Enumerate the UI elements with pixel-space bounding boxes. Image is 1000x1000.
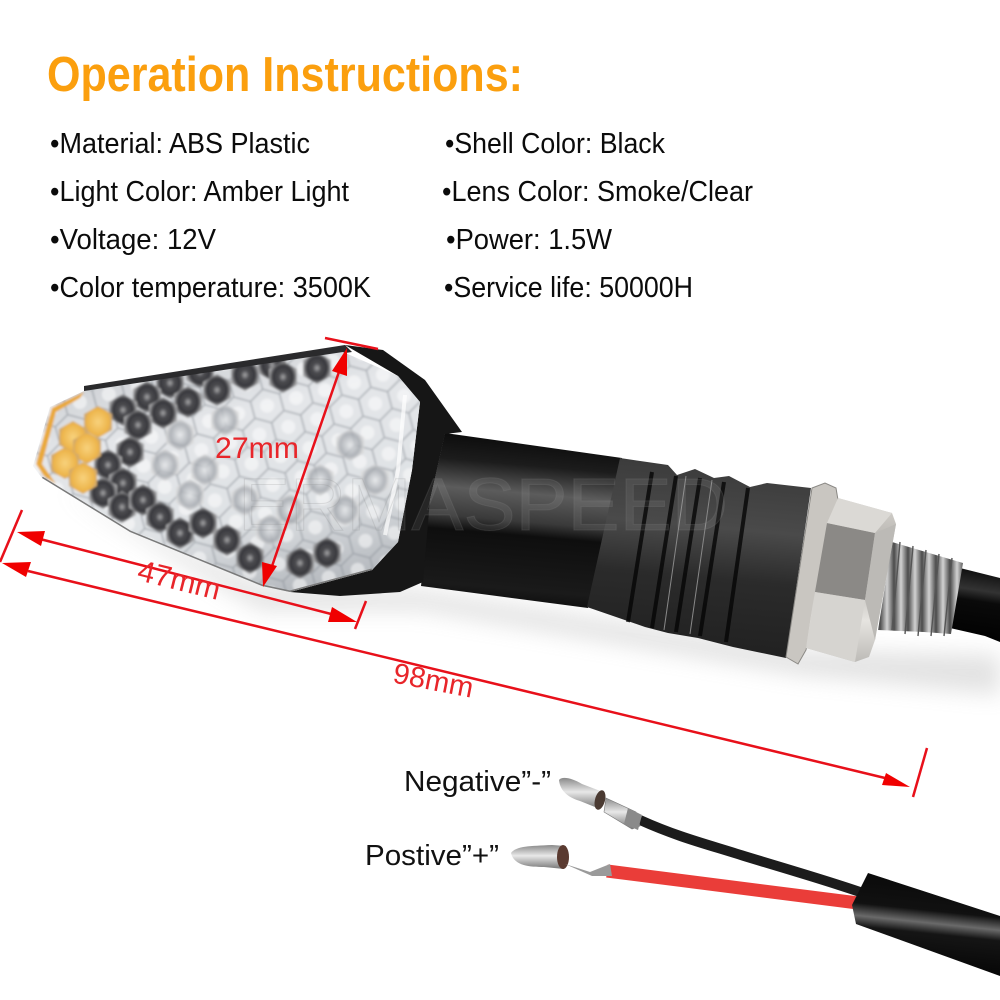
arrowhead left (2, 562, 31, 577)
red positive wire (607, 871, 858, 903)
smoked lens cells (89, 349, 341, 579)
threaded bolt (878, 542, 963, 636)
black housing (290, 345, 462, 596)
black tube body (421, 433, 622, 608)
lens rim highlight (42, 478, 372, 592)
arrowhead right (882, 773, 910, 787)
positive bullet connector (511, 845, 612, 876)
faint watermark: ERMASPEED (238, 463, 728, 546)
arrowhead bottom (262, 562, 277, 587)
arrowhead right (328, 607, 357, 622)
specification list: left column: •Voltage: 12V (50, 224, 217, 256)
mid grey lens cells (151, 404, 389, 546)
specification list: right column: •Power: 1.5W (446, 224, 613, 256)
black negative wire (640, 820, 860, 892)
rear cable (950, 568, 1000, 642)
main lamp product illustration (20, 340, 1000, 664)
specification list: right column (442, 128, 753, 304)
housing top edge (84, 345, 352, 392)
47mm label: 47mm (134, 554, 224, 607)
amber tip (36, 392, 112, 494)
cast shadow under lamp (60, 490, 1000, 695)
hex nut (806, 498, 896, 662)
dimension: 47mm (0, 510, 366, 629)
rubber boot with ridges (587, 458, 811, 658)
title: Operation Instructions: (47, 48, 523, 102)
specification list: right column: •Service life: 50000H (444, 272, 693, 304)
specification list: left column (50, 128, 372, 304)
label: positive wire: Postive”+” (365, 840, 499, 872)
negative bullet connector (559, 778, 642, 830)
27mm label: 27mm (215, 432, 299, 465)
flange washer (786, 483, 838, 664)
98mm label: 98mm (390, 658, 476, 705)
black cable sleeve (852, 873, 1000, 976)
arrowhead top (332, 348, 347, 376)
clear hexagon lens (33, 352, 420, 592)
label: negative wire: Negative”-” (404, 766, 551, 798)
specification list: right column: •Lens Color: Smoke/Clear (442, 176, 753, 208)
connector wires assembly (511, 778, 1000, 976)
dimension: 98mm (2, 562, 927, 797)
specification list: left column: •Light Color: Amber Light (50, 176, 349, 208)
specification list: left column: •Material: ABS Plastic (50, 128, 310, 160)
specification list: left column: •Color temperature: 3500K (50, 272, 372, 304)
dimension: 27mm (215, 338, 378, 587)
specification list: right column: •Shell Color: Black (445, 128, 665, 160)
arrowhead left (17, 531, 45, 546)
